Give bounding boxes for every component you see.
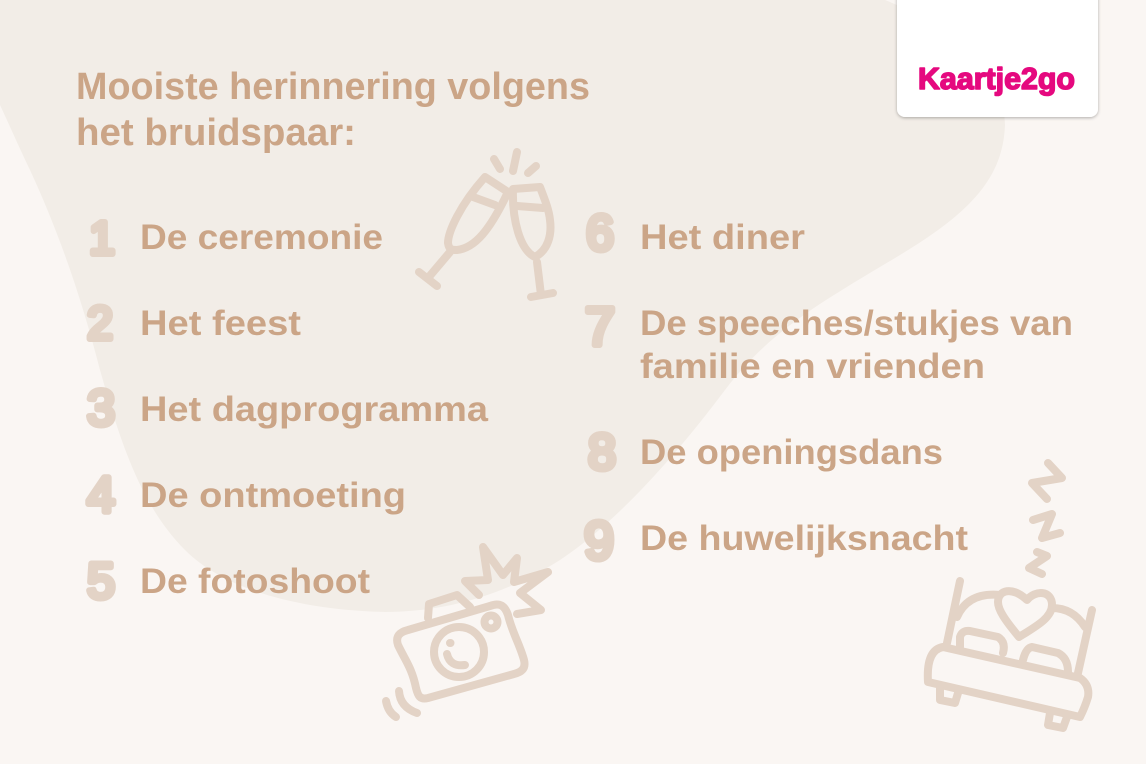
title: Mooiste herinnering volgens (76, 66, 590, 108)
title (76, 66, 590, 154)
item 3: 3 (87, 380, 115, 436)
item 5: 5 (87, 553, 115, 609)
item 6: 6 (586, 205, 614, 261)
item 4: 4 (87, 467, 115, 523)
icon: camera with flash (386, 547, 548, 717)
item 7: 7 (585, 297, 615, 357)
item 5: De fotoshoot (140, 562, 370, 601)
item 7 (585, 297, 1073, 386)
item 2: 2 (87, 297, 113, 349)
ranking list: left column (87, 212, 489, 609)
item 2: Het feest (140, 304, 301, 343)
title: het bruidspaar: (76, 112, 356, 154)
logo wordmark: Kaartje2go (918, 61, 1075, 96)
item 9: 9 (584, 511, 614, 571)
icon: bed with heart and sleep symbols (928, 463, 1092, 728)
ranking list: right column (584, 205, 1073, 571)
item 8: De openingsdans (640, 433, 943, 472)
item 8: 8 (588, 424, 616, 480)
background blob (0, 0, 1005, 612)
item 4: De ontmoeting (140, 476, 406, 515)
item 3: Het dagprogramma (140, 390, 489, 429)
item 9: De huwelijksnacht (640, 519, 968, 558)
item 7: familie en vrienden (640, 347, 985, 386)
item 6: Het diner (640, 218, 805, 257)
item 6 (586, 205, 805, 261)
item 1: De ceremonie (140, 218, 383, 257)
item 7: De speeches/stukjes van (640, 304, 1073, 343)
item 1: 1 (89, 212, 115, 264)
item 9 (584, 511, 968, 571)
logo card (897, 0, 1098, 117)
item 8 (588, 424, 943, 480)
item 3 (87, 380, 489, 436)
icon: champagne glasses (419, 152, 553, 297)
item 1 (89, 212, 383, 264)
item 4 (87, 467, 406, 523)
item 2 (87, 297, 301, 349)
item 5 (87, 553, 370, 609)
